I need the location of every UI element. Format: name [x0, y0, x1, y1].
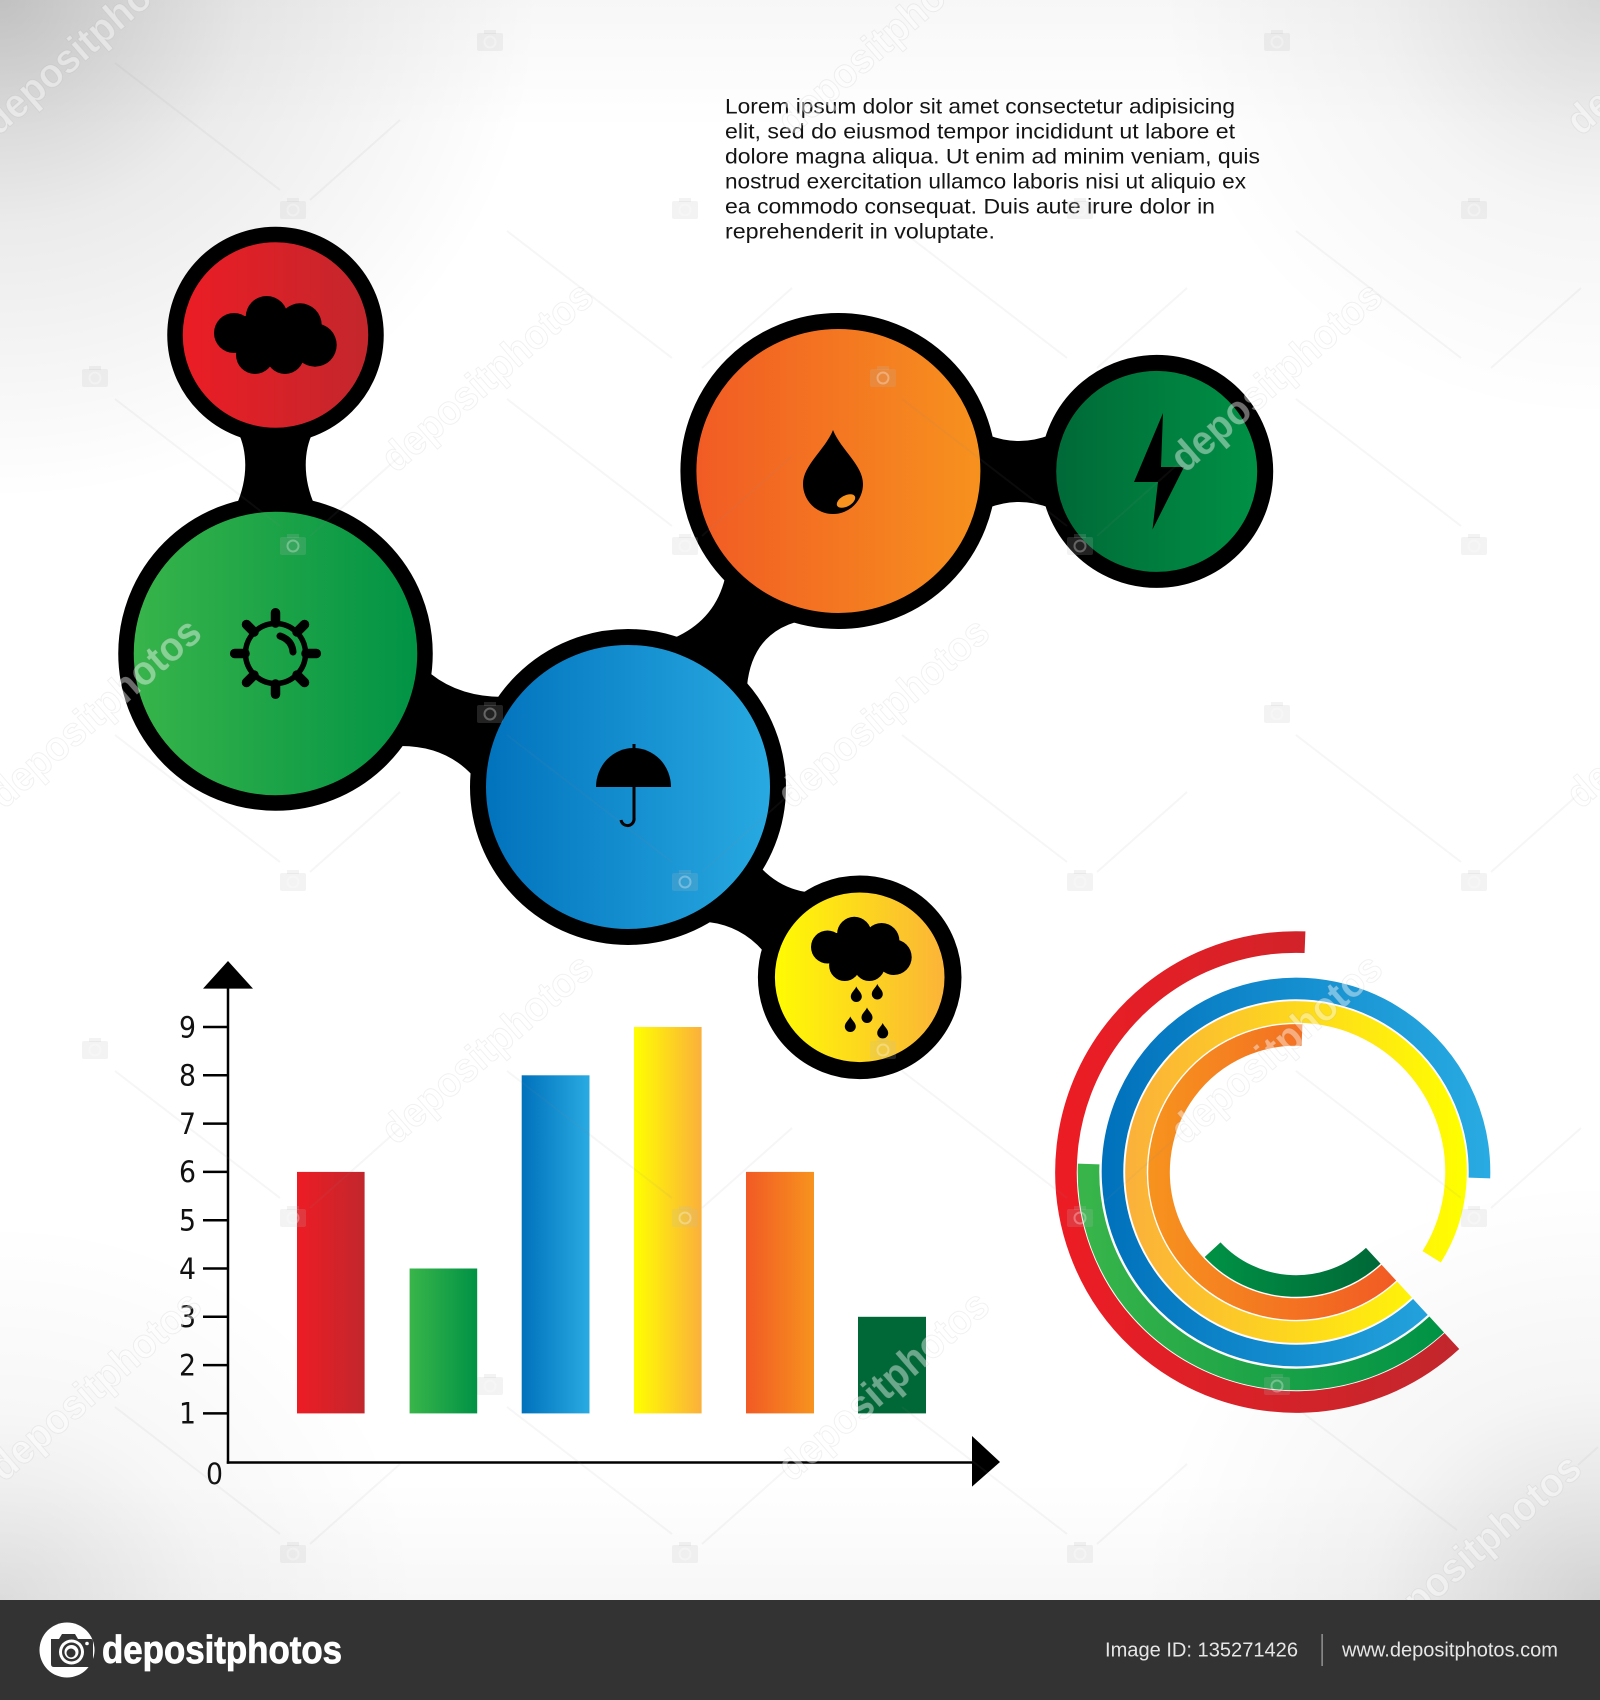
connector: blue to orange — [674, 578, 796, 686]
axis labels: 3 — [179, 1300, 196, 1334]
axis labels: 0 — [206, 1457, 223, 1491]
footer bar — [0, 1600, 1600, 1700]
watermark: camera marks — [82, 30, 1487, 1563]
watermark: repeated wordmarks: depositphotos — [1360, 1444, 1590, 1653]
paragraph text: elit, sed do eiusmod tempor incididunt ut labore et — [725, 120, 1235, 144]
paragraph text: reprehenderit in voluptate. — [725, 220, 995, 244]
connector: green to blue — [398, 674, 504, 776]
arrow: y axis — [203, 961, 253, 989]
node: dark green lightning — [1048, 363, 1265, 580]
arrow: x axis — [972, 1436, 1000, 1487]
connector: red to green — [236, 432, 315, 506]
footer image id: Image ID: 135271426 — [1105, 1640, 1298, 1662]
node: green sun — [126, 504, 425, 803]
paragraph text: nostrud exercitation ullamco laboris nisi ut aliquio ex — [725, 170, 1247, 194]
axis labels: 8 — [179, 1059, 196, 1093]
watermark: repeated wordmarks: depositphotos — [1161, 272, 1391, 481]
icon: cloud — [214, 296, 337, 374]
radial ring chart — [1066, 942, 1479, 1402]
connector: blue to yellow — [708, 868, 806, 952]
paragraph text: ea commodo consequat. Duis aute irure dolor in — [725, 196, 1215, 218]
paragraph text: Lorem ipsum dolor sit amet consectetur adipisicing — [725, 96, 1235, 118]
connector: orange to dark green — [988, 435, 1050, 508]
axis labels: 6 — [179, 1155, 196, 1189]
axis labels: 1 — [179, 1397, 196, 1431]
footer website: www.depositphotos.com — [1341, 1640, 1558, 1662]
paragraph text — [725, 96, 1260, 244]
icon: lightning bolt — [1134, 413, 1184, 530]
bar chart — [179, 961, 1000, 1491]
footer logo icon — [40, 1622, 94, 1678]
icon: sun — [235, 613, 316, 694]
axis labels: 4 — [179, 1252, 196, 1286]
footer logo wordmark: depositphotos — [102, 1629, 342, 1672]
watermark: repeated wordmarks: depositphotos — [372, 272, 602, 481]
axis labels: 7 — [179, 1107, 196, 1141]
watermark: repeated wordmarks: depositphotos — [768, 608, 998, 817]
icon: umbrella — [596, 744, 671, 826]
paragraph text: dolore magna aliqua. Ut enim ad minim veniam, quis — [725, 146, 1260, 168]
bars — [297, 1027, 926, 1413]
node: blue umbrella — [478, 637, 778, 937]
node: orange drop — [688, 321, 988, 621]
footer divider — [1322, 1634, 1323, 1666]
axis labels: 2 — [179, 1348, 196, 1382]
watermark: repeated wordmarks: depositphotos — [1161, 944, 1391, 1153]
node: red cloud — [175, 234, 376, 436]
axis labels: 5 — [179, 1204, 196, 1238]
watermark: repeated wordmarks: depositphotos — [768, 1281, 998, 1490]
node: yellow rain — [766, 884, 953, 1071]
icon: water drop — [803, 430, 863, 514]
watermark: repeated wordmarks: depositphotos — [372, 944, 602, 1153]
axis labels: 9 — [179, 1010, 196, 1044]
icon: rain cloud — [811, 917, 912, 1038]
chart axes — [203, 985, 975, 1464]
axis labels — [179, 1010, 223, 1491]
